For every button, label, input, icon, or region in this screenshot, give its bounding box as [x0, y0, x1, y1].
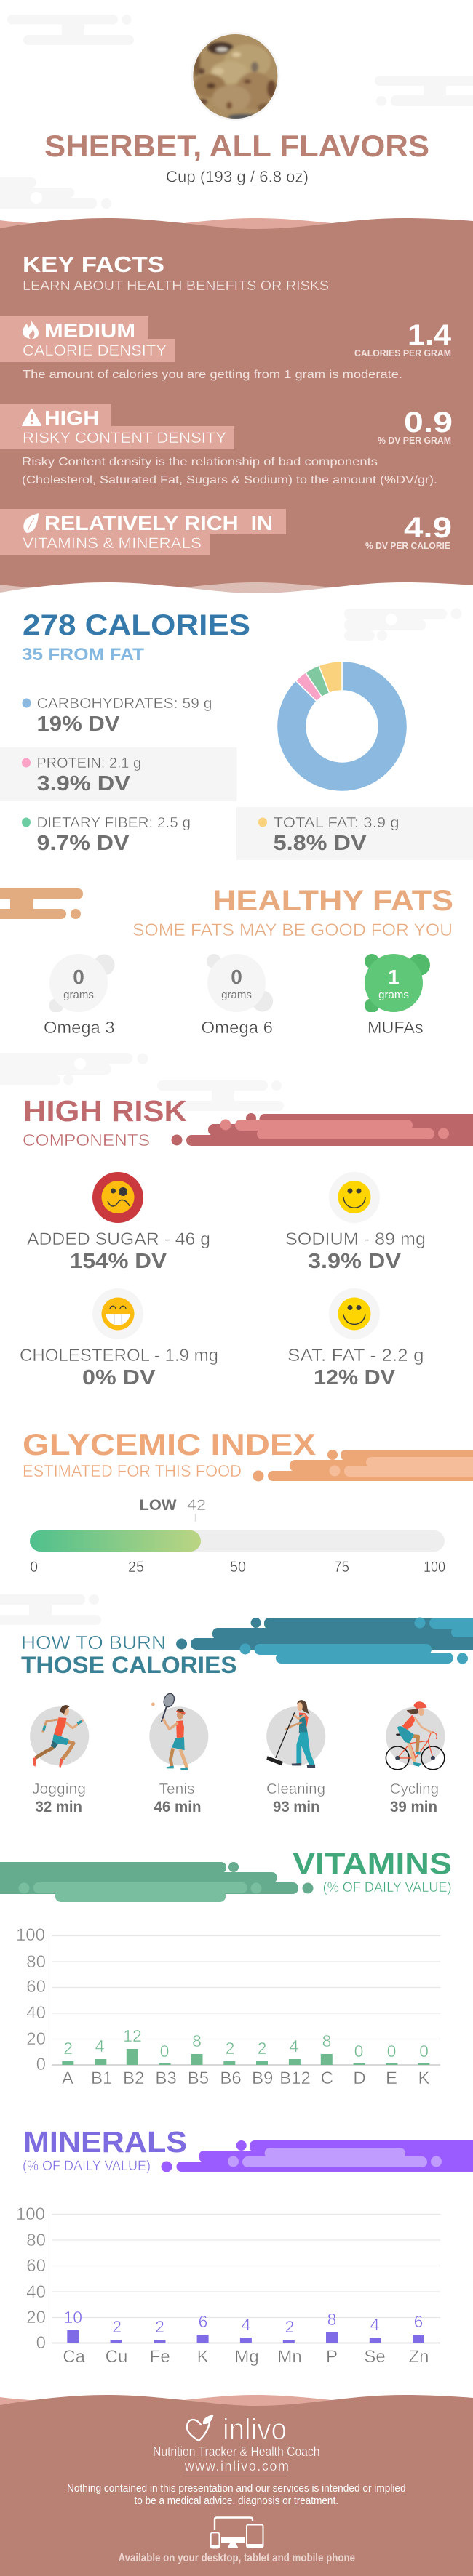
- bar chart: vitamins: 0: [36, 2055, 46, 2074]
- heading: glycemic index: GLYCEMIC INDEX: [23, 1427, 316, 1461]
- risk item: sodium: 3.9% DV: [308, 1250, 402, 1273]
- icon: person sweeping: [266, 1700, 325, 1768]
- activity: cycling: Cycling: [390, 1781, 439, 1797]
- activity: tennis: 46 min: [154, 1799, 201, 1815]
- legend: protein: 3.9% DV: [36, 772, 131, 795]
- bar chart: vitamins: B1: [91, 2069, 112, 2088]
- gauge: glycemic index: 25: [128, 1559, 144, 1576]
- bar chart: minerals: K: [197, 2347, 209, 2367]
- disclaimer: [67, 2482, 406, 2507]
- badge: MUFAs: 1: [388, 966, 400, 988]
- bar chart: minerals: 0: [36, 2333, 46, 2353]
- donut chart: macronutrients: [277, 662, 407, 791]
- bar chart: vitamins: B6: [220, 2069, 242, 2088]
- bar chart: vitamins: 0: [419, 2042, 429, 2061]
- bar chart: vitamins: 0: [354, 2042, 363, 2061]
- bar chart: vitamins: 20: [26, 2029, 46, 2049]
- fact: risky content density: Risky Content density is the relationship of bad components: [22, 456, 378, 468]
- icon: sad face: [92, 1172, 143, 1223]
- heading: minerals: MINERALS: [23, 2125, 187, 2159]
- bar chart: vitamins: 8: [322, 2031, 331, 2050]
- decorative cloud: calories: [344, 608, 461, 641]
- icon: flame: [23, 320, 39, 339]
- bar chart: minerals: 60: [26, 2256, 46, 2276]
- icon: runner: [30, 1705, 89, 1768]
- subheading: vitamins: (% OF DAILY VALUE): [323, 1880, 452, 1895]
- icon: smile face: [329, 1288, 380, 1339]
- legend: carbohydrates: [22, 696, 212, 736]
- risk item: saturated fat: [287, 1288, 424, 1389]
- fact: calorie density: CALORIE DENSITY: [23, 342, 167, 359]
- decorative banner: minerals: [162, 2140, 473, 2172]
- heading: high risk: HIGH RISK: [23, 1094, 187, 1128]
- bar chart: vitamins: K: [418, 2069, 430, 2088]
- subheading: calories from fat: 35 FROM FAT: [22, 645, 144, 665]
- badge: MUFAs: [365, 954, 430, 1037]
- bar chart: vitamins: B12: [279, 2069, 311, 2088]
- bar chart: minerals: 20: [26, 2308, 46, 2327]
- fact: vitamins and minerals: RELATIVELY RICH IN: [44, 512, 273, 534]
- gauge: glycemic index: [30, 1497, 445, 1576]
- bar chart: vitamins: 8: [192, 2031, 202, 2050]
- decorative cloud: high risk left: [0, 1053, 148, 1085]
- heading: healthy fats: HEALTHY FATS: [212, 885, 453, 917]
- bar chart: vitamins: D: [353, 2069, 366, 2088]
- bar chart: minerals: 100: [16, 2204, 45, 2224]
- logo: heart and leaf: [187, 2415, 214, 2441]
- gauge: glycemic index: 50: [230, 1559, 246, 1576]
- decorative cloud: high risk right: [157, 1080, 284, 1111]
- serving size: Cup (193 g / 6.8 oz): [166, 167, 309, 186]
- heading: calories: 278 CALORIES: [23, 609, 250, 641]
- bar chart: minerals: Zn: [408, 2347, 429, 2367]
- decorative cloud: header left: [7, 15, 134, 45]
- bar chart: vitamins: B5: [188, 2069, 209, 2088]
- logo text: inlivo: [223, 2412, 287, 2446]
- risk item: added sugar: ADDED SUGAR - 46 g: [27, 1229, 210, 1249]
- bar chart: minerals: Mn: [277, 2347, 302, 2367]
- bar chart: vitamins: 4: [290, 2037, 299, 2055]
- bar chart: minerals: 4: [370, 2315, 380, 2334]
- fact: calorie density: The amount of calories you are getting from 1 gram is moderate.: [23, 369, 402, 381]
- fact: vitamins and minerals: VITAMINS & MINERALS: [23, 535, 202, 552]
- website link: www.inlivo.com: [184, 2459, 289, 2473]
- bar chart: minerals: 4: [242, 2315, 251, 2334]
- bar chart: minerals: Mg: [234, 2347, 259, 2367]
- fact: calorie density: 1.4: [408, 319, 452, 351]
- icon: tennis player: [149, 1692, 208, 1770]
- panel: footer: [0, 2395, 473, 2576]
- subheading: components: COMPONENTS: [23, 1131, 150, 1149]
- bar chart: minerals: [16, 2204, 440, 2367]
- subheading: healthy fats: SOME FATS MAY BE GOOD FOR YOU: [132, 920, 453, 940]
- activity: jogging: Jogging: [32, 1781, 86, 1797]
- bar chart: minerals: 8: [327, 2310, 336, 2329]
- risk item: saturated fat: SAT. FAT - 2.2 g: [287, 1346, 424, 1365]
- risk item: saturated fat: 12% DV: [314, 1366, 396, 1389]
- fact: calorie density: MEDIUM: [44, 319, 135, 342]
- legend: total fat: 5.8% DV: [274, 832, 367, 855]
- risk item: sodium: SODIUM - 89 mg: [285, 1229, 426, 1249]
- activity: cleaning: [266, 1700, 325, 1815]
- heading: those calories: THOSE CALORIES: [21, 1652, 237, 1678]
- fact: vitamins and minerals: % DV PER CALORIE: [365, 541, 450, 551]
- bar chart: minerals: P: [326, 2347, 338, 2367]
- decorative banner: vitamins: [0, 1862, 313, 1902]
- legend: carbohydrates: CARBOHYDRATES: 59 g: [36, 696, 212, 712]
- bar chart: minerals: Ca: [63, 2347, 86, 2367]
- bar chart: minerals: Se: [364, 2347, 386, 2367]
- risk item: added sugar: [27, 1172, 210, 1273]
- icon: smile face: [329, 1172, 380, 1223]
- fact: risky content density: RISKY CONTENT DENSITY: [23, 430, 226, 446]
- gauge: glycemic index: 100: [424, 1559, 445, 1576]
- heading: how to burn: HOW TO BURN: [21, 1632, 166, 1653]
- activity: jogging: 32 min: [35, 1799, 82, 1815]
- bar chart: minerals: Fe: [150, 2347, 170, 2367]
- bar chart: vitamins: C: [321, 2069, 333, 2088]
- panel: key facts: [0, 218, 473, 604]
- bar chart: vitamins: A: [62, 2069, 73, 2088]
- fact: risky content density: [0, 404, 453, 486]
- bar chart: minerals: 80: [26, 2231, 46, 2250]
- bar chart: vitamins: 0: [387, 2042, 396, 2061]
- badge: omega 3: [44, 954, 115, 1037]
- heading: vitamins: VITAMINS: [293, 1847, 452, 1880]
- availability note: Available on your desktop, tablet and mobile phone: [118, 2552, 355, 2564]
- activity: cycling: 39 min: [390, 1799, 437, 1815]
- risk item: added sugar: 154% DV: [70, 1250, 167, 1273]
- activity: cleaning: Cleaning: [266, 1781, 325, 1797]
- activity: cycling: [386, 1701, 445, 1815]
- fact: risky content density: 0.9: [404, 406, 453, 438]
- bar chart: minerals: 6: [199, 2312, 207, 2331]
- decorative banner: glycemic index: [253, 1450, 473, 1482]
- decorative banner: burn calories: [176, 1617, 473, 1664]
- disclaimer: to be a medical advice, diagnosis or treatment.: [134, 2495, 338, 2507]
- risk item: cholesterol: CHOLESTEROL - 1.9 mg: [20, 1346, 218, 1365]
- bar chart: minerals: 10: [64, 2308, 82, 2327]
- activity: jogging: [30, 1705, 89, 1815]
- bar chart: minerals: 6: [414, 2312, 423, 2331]
- legend: carbohydrates: 19% DV: [36, 713, 120, 736]
- fact: risky content density: HIGH: [44, 406, 99, 429]
- bar chart: vitamins: B2: [123, 2069, 144, 2088]
- subheading: key facts: LEARN ABOUT HEALTH BENEFITS OR RISKS: [23, 278, 329, 293]
- badge: omega 3: 0: [73, 966, 84, 988]
- badge: omega 6: grams: [221, 989, 252, 1001]
- gauge: glycemic index: 0: [31, 1559, 38, 1576]
- risk item: sodium: [285, 1172, 426, 1273]
- bar chart: minerals: 2: [112, 2317, 122, 2336]
- badge: MUFAs: grams: [378, 989, 409, 1001]
- legend: protein: PROTEIN: 2.1 g: [36, 755, 141, 771]
- risk item: cholesterol: 0% DV: [82, 1366, 156, 1389]
- bar chart: vitamins: [16, 1925, 440, 2088]
- bar chart: vitamins: 2: [258, 2039, 266, 2058]
- activity: cleaning: 93 min: [273, 1799, 320, 1815]
- activity: tennis: Tenis: [159, 1781, 195, 1797]
- fact: risky content density: % DV PER GRAM: [378, 436, 451, 446]
- decorative banner: high risk: [172, 1113, 473, 1146]
- decorative cloud: burn calories: [0, 1594, 101, 1625]
- badge: omega 3: grams: [63, 989, 94, 1001]
- bar chart: vitamins: 40: [26, 2003, 46, 2023]
- decorative cloud: header lower left: [0, 177, 111, 209]
- bar chart: vitamins: 100: [16, 1925, 45, 1945]
- bar chart: vitamins: 12: [123, 2026, 142, 2045]
- gauge: glycemic index: 42: [187, 1497, 206, 1514]
- badge: omega 3: Omega 3: [44, 1018, 115, 1037]
- bar chart: vitamins: 2: [63, 2039, 73, 2058]
- subheading: glycemic index: ESTIMATED FOR THIS FOOD: [23, 1461, 242, 1480]
- icon: warning triangle: [23, 409, 41, 425]
- icon: devices: [211, 2517, 263, 2548]
- badge: omega 6: [201, 954, 273, 1037]
- food photo: [189, 32, 280, 121]
- bar chart: vitamins: B9: [252, 2069, 273, 2088]
- bar chart: vitamins: 4: [95, 2037, 105, 2055]
- legend: dietary fiber: 9.7% DV: [36, 832, 130, 855]
- legend: protein: [0, 747, 237, 801]
- decorative cloud: header right: [375, 76, 473, 106]
- risk item: cholesterol: [20, 1288, 218, 1389]
- bar chart: vitamins: 80: [26, 1952, 46, 1972]
- subheading: minerals: (% OF DAILY VALUE): [23, 2159, 151, 2174]
- tagline: Nutrition Tracker & Health Coach: [153, 2444, 320, 2459]
- decorative banner: healthy fats: [0, 888, 83, 919]
- badge: MUFAs: MUFAs: [367, 1018, 424, 1037]
- fact: calorie density: CALORIES PER GRAM: [354, 348, 451, 358]
- icon: leaf: [23, 513, 39, 533]
- bar chart: minerals: 2: [155, 2317, 164, 2336]
- icon: cyclist: [386, 1701, 445, 1770]
- bar chart: vitamins: 60: [26, 1977, 46, 1997]
- legend: dietary fiber: DIETARY FIBER: 2.5 g: [36, 815, 191, 831]
- legend: total fat: TOTAL FAT: 3.9 g: [274, 815, 400, 831]
- badge: omega 6: 0: [231, 966, 242, 988]
- icon: grin face: [92, 1288, 143, 1339]
- title: SHERBET, ALL FLAVORS: [44, 129, 429, 163]
- activity: tennis: [149, 1692, 208, 1815]
- bar chart: vitamins: 2: [226, 2039, 234, 2058]
- bar chart: vitamins: E: [386, 2069, 397, 2088]
- gauge: glycemic index: LOW: [140, 1497, 177, 1514]
- fact: vitamins and minerals: 4.9: [404, 512, 452, 544]
- disclaimer: Nothing contained in this presentation and our services is intended or implied: [67, 2482, 406, 2495]
- bar chart: minerals: 2: [285, 2317, 294, 2336]
- fact: vitamins and minerals: [0, 509, 452, 555]
- fact: calorie density: [0, 316, 452, 381]
- gauge: glycemic index: 75: [334, 1559, 349, 1576]
- legend: dietary fiber: [22, 815, 191, 855]
- heading: key facts: KEY FACTS: [23, 252, 164, 277]
- bar chart: minerals: Cu: [106, 2347, 127, 2367]
- fact: risky content density: (Cholesterol, Saturated Fat, Sugars & Sodium) to the amount (%DV/gr).: [22, 474, 437, 486]
- legend: total fat: [236, 807, 473, 860]
- bar chart: vitamins: B3: [155, 2069, 177, 2088]
- bar chart: vitamins: 0: [160, 2042, 169, 2061]
- bar chart: minerals: 40: [26, 2282, 46, 2302]
- badge: omega 6: Omega 6: [201, 1018, 273, 1037]
